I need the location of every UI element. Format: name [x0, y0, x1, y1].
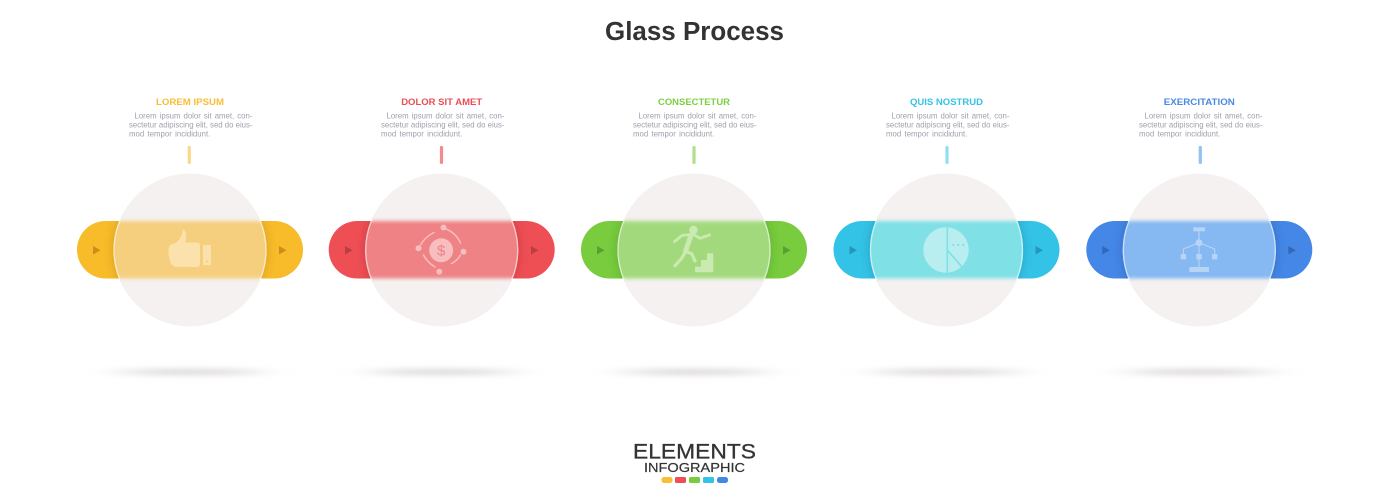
text block: step 4 description: sectetur adipiscing elit, sed do eius- — [886, 120, 1010, 130]
text block: step 3 description: sectetur adipiscing elit, sed do eius- — [633, 120, 757, 130]
connector tick — [945, 146, 949, 164]
text block: step 2 description: sectetur adipiscing elit, sed do eius- — [381, 120, 505, 130]
connector tick — [188, 146, 191, 164]
icon: dollar cycle: $ — [437, 243, 446, 260]
icon: org chart — [1181, 227, 1217, 272]
text block: step 4 description — [886, 112, 1010, 138]
text block: step 1 description: Lorem ipsum dolor sit amet, con- — [134, 112, 253, 120]
text block: step 1 description: mod tempor incididunt. — [129, 130, 210, 138]
ground shadow — [874, 369, 1018, 375]
glass circle — [617, 174, 771, 326]
text block: step 5 description — [1139, 112, 1263, 138]
panel: step 4 quis nostrud — [834, 97, 1060, 375]
heading: dolor sit amet: DOLOR SIT AMET — [401, 97, 482, 108]
pill with arrows — [328, 221, 555, 278]
glass circle — [365, 174, 518, 326]
panel: step 1 lorem ipsum — [77, 97, 303, 375]
logo wordmark: infographic: INFOGRAPHIC — [644, 460, 745, 475]
text block: step 3 description — [633, 112, 757, 138]
logo — [633, 440, 756, 483]
pill with arrows — [77, 221, 303, 278]
panel: step 5 exercitation — [1086, 97, 1312, 375]
heading: quis nostrud: QUIS NOSTRUD — [910, 97, 983, 108]
text block: step 1 description: sectetur adipiscing elit, sed do eius- — [129, 120, 253, 130]
text block: step 5 description: Lorem ipsum dolor sit amet, con- — [1144, 112, 1263, 120]
pill with arrows — [581, 221, 807, 278]
panel: step 2 dolor sit amet — [329, 97, 555, 375]
text block: step 2 description — [381, 112, 505, 138]
text block: step 5 description: mod tempor incididunt. — [1139, 130, 1220, 138]
icon: thumbs up — [168, 230, 211, 267]
connector tick — [692, 146, 696, 164]
connector tick — [1199, 146, 1202, 164]
ground shadow — [622, 369, 766, 375]
icon: pie chart — [923, 226, 969, 273]
panel: step 3 consectetur — [581, 97, 807, 375]
text block: step 4 description: mod tempor incididunt. — [886, 130, 967, 138]
heading: lorem ipsum: LOREM IPSUM — [156, 97, 224, 108]
text block: step 2 description: mod tempor incididunt. — [381, 130, 462, 138]
text block: step 5 description: sectetur adipiscing elit, sed do eius- — [1139, 120, 1263, 130]
glass circle — [113, 174, 267, 326]
text block: step 1 description — [129, 112, 253, 138]
heading: exercitation: EXERCITATION — [1164, 97, 1235, 108]
glass circle — [870, 174, 1024, 326]
logo colour chips — [662, 477, 728, 483]
heading: consectetur: CONSECTETUR — [658, 97, 730, 108]
text block: step 4 description: Lorem ipsum dolor sit amet, con- — [892, 112, 1010, 120]
text block: step 2 description: Lorem ipsum dolor sit amet, con- — [386, 112, 505, 120]
icon: dollar cycle — [416, 224, 466, 275]
text block: step 3 description: mod tempor incididunt. — [633, 130, 714, 138]
icon: runner on stairs — [674, 226, 713, 272]
ground shadow — [1127, 369, 1271, 375]
pill with arrows — [1086, 221, 1312, 278]
text block: step 3 description: Lorem ipsum dolor sit amet, con- — [638, 112, 757, 120]
ground shadow — [118, 369, 262, 375]
connector tick — [440, 146, 443, 164]
title: Glass Process — [605, 18, 784, 46]
pill with arrows — [834, 221, 1060, 278]
logo wordmark: elements: ELEMENTS — [633, 440, 756, 464]
glass circle — [1122, 174, 1276, 326]
ground shadow — [370, 369, 514, 375]
